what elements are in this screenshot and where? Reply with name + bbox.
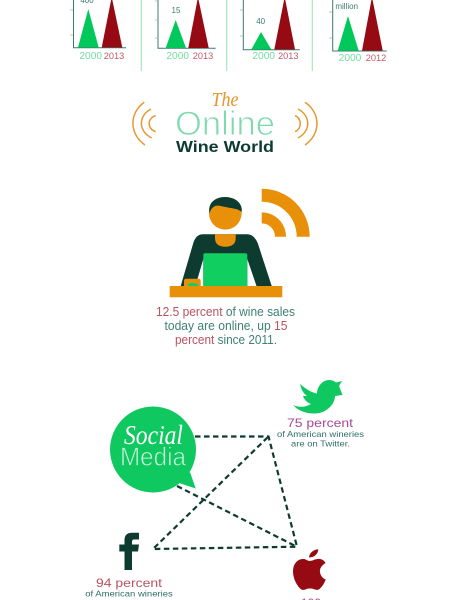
chart: 2000 vs 2013, second panel: 2013 — [193, 51, 213, 61]
chart: 2000 vs 2012, fourth panel — [329, 0, 387, 64]
icon: left broadcast arcs — [133, 102, 156, 145]
speech bubble: Social Media — [110, 406, 196, 492]
text: Facebook statistic — [85, 576, 173, 600]
arm gaps — [198, 259, 256, 286]
chart: 2000 vs 2013, third panel: 2000 — [252, 51, 275, 62]
speech bubble: Social Media: Social — [124, 420, 183, 450]
icon: person at laptop — [170, 197, 282, 297]
icon: right broadcast arcs — [295, 102, 317, 145]
hand — [184, 279, 201, 286]
dashed network lines — [153, 436, 297, 549]
chart: 2000 vs 2013, second panel: 15 — [172, 6, 181, 15]
heading: The Online Wine World: Wine World — [176, 139, 274, 156]
hair — [209, 197, 242, 214]
text: Twitter statistic: are on Twitter. — [291, 438, 350, 448]
text: online wine sales statistic: today are online, up 15 — [164, 319, 288, 333]
chart: 2000 vs 2013, second panel: 2000 — [166, 51, 189, 62]
text: online wine sales statistic: percent since 2011. — [175, 333, 277, 347]
neck — [215, 234, 236, 247]
text: online wine sales statistic: 12.5 percent of wine sales — [156, 305, 295, 319]
table — [170, 286, 282, 297]
icon: Twitter bird — [293, 380, 342, 414]
chart: 2000 vs 2012, fourth panel: million — [335, 2, 358, 11]
head — [209, 197, 242, 230]
chart: 2000 vs 2013, third panel: 40 — [256, 17, 266, 26]
text: Twitter statistic: 75 percent — [287, 416, 354, 430]
chart: 2000 vs 2013, first panel — [70, 0, 126, 62]
text: Facebook statistic: of American wineries — [85, 589, 173, 599]
chart: 2000 vs 2012, fourth panel: 2012 — [366, 53, 386, 63]
text: Facebook statistic: 94 percent — [96, 576, 163, 590]
icon: Apple logo — [293, 549, 326, 590]
speech bubble: Social Media: Media — [120, 442, 186, 472]
chart: 2000 vs 2013, second panel — [155, 0, 216, 62]
chart: 2000 vs 2013, first panel: 2013 — [104, 51, 124, 61]
icon: Facebook f — [119, 533, 139, 570]
chart: 2000 vs 2013, third panel: 2013 — [278, 51, 299, 61]
text: Twitter statistic — [277, 416, 364, 448]
heading: The Online Wine World — [175, 89, 275, 156]
chart: 2000 vs 2013, third panel — [240, 0, 300, 62]
chart: 2000 vs 2012, fourth panel: 2000 — [339, 53, 362, 64]
heading: The Online Wine World: Online — [175, 105, 275, 143]
text: online wine sales statistic — [156, 305, 295, 347]
heading: The Online Wine World: The — [212, 89, 239, 111]
laptop — [203, 253, 247, 286]
chart: 2000 vs 2013, first panel: 2000 — [79, 51, 102, 62]
icon: RSS signal — [262, 189, 310, 237]
body — [181, 234, 272, 286]
text: Twitter statistic: of American wineries — [277, 429, 364, 439]
